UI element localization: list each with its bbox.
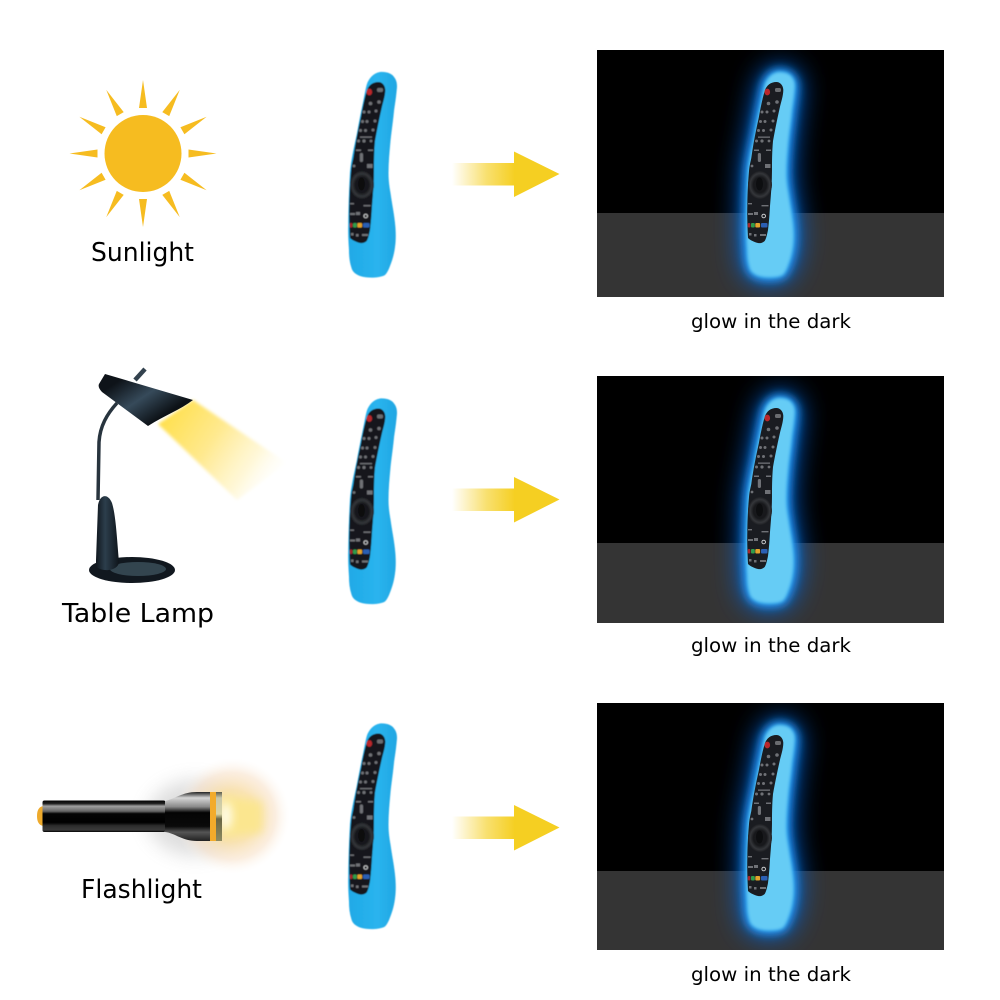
arrow [452,477,560,522]
caption: glow in the dark [691,634,852,657]
row 2: table lamp [61,369,944,657]
glowing remote [746,725,795,931]
caption: glow in the dark [691,963,852,986]
arrow [452,805,560,850]
label: Flashlight: Flashlight [81,875,202,905]
label: Table Lamp: Table Lamp [61,599,214,629]
remote in blue case [348,72,397,278]
glowing remote [746,72,795,278]
remote in blue case [348,398,397,604]
icon: sun [70,80,216,227]
icon: flashlight [37,758,290,874]
label: Sunlight: Sunlight [91,238,194,268]
glowing remote [746,398,795,604]
icon: table lamp [89,369,287,583]
panel: glow in the dark [597,703,944,950]
remote in blue case [348,723,397,929]
arrow [452,152,560,197]
caption: glow in the dark [691,310,852,333]
panel: glow in the dark [597,50,944,297]
row 1: sunlight [70,50,944,333]
panel: glow in the dark [597,376,944,623]
row 3: flashlight [37,703,944,986]
